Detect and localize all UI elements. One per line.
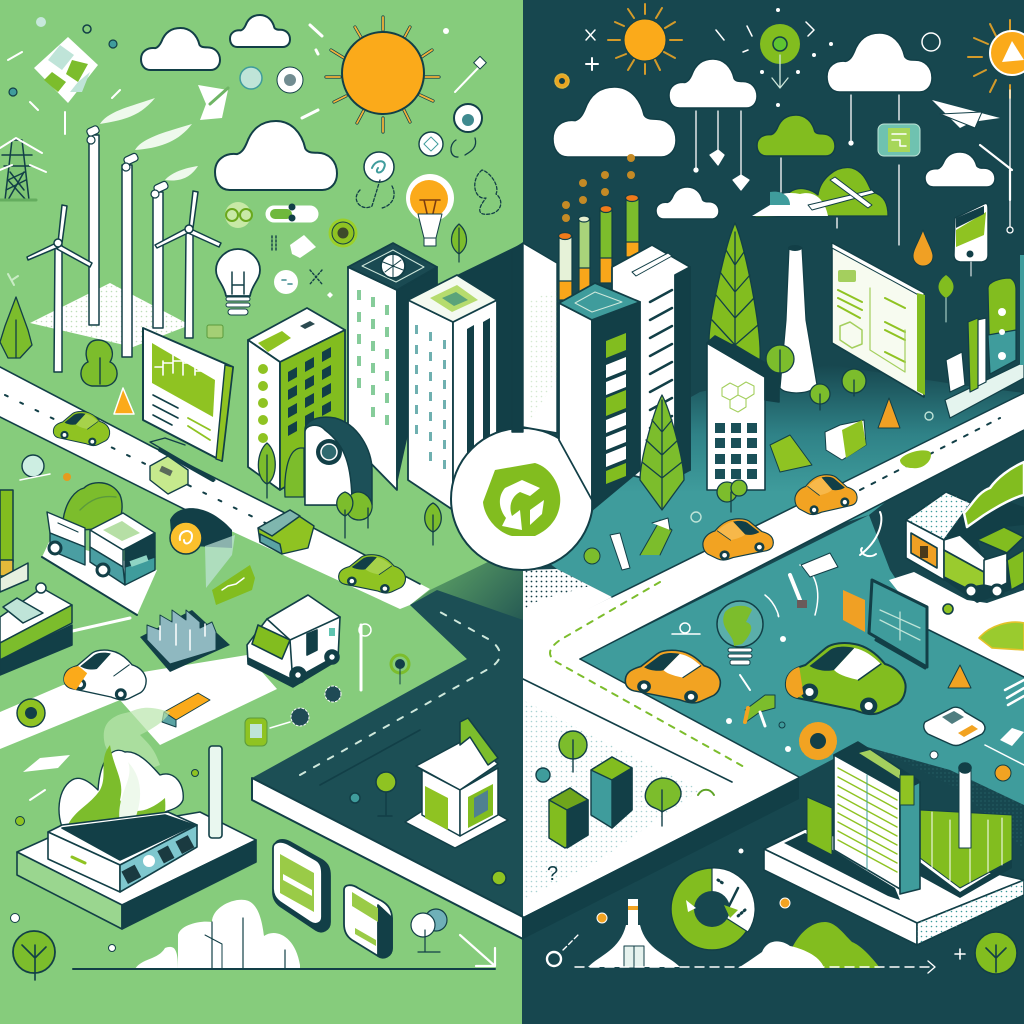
icon: horizon line and arrow left	[73, 935, 495, 969]
icon: pine tree left	[0, 297, 32, 358]
background: green half	[0, 0, 523, 1024]
icon: tree disc bottom left	[10, 770, 198, 980]
icon: chip sign	[878, 124, 920, 156]
icon: right-hand truck on white slab	[889, 462, 1024, 677]
icon: globe bulb	[717, 595, 779, 665]
panel: molecule building	[707, 336, 779, 490]
icon: clouds green side	[141, 15, 337, 190]
icon: small vehicle on road	[150, 450, 213, 494]
icon: traffic cone left	[114, 388, 134, 414]
icon: lime car left road	[53, 411, 110, 446]
panel: white stripe building	[612, 245, 690, 480]
icon: plane top right	[932, 100, 1012, 200]
icon: orange light bulb	[406, 174, 454, 246]
icon: orange cars on road	[703, 475, 857, 560]
icon: donut chart	[671, 868, 755, 950]
icon: tablet screen in teal	[843, 580, 927, 668]
icon: white delivery van	[247, 595, 340, 687]
icon: crystal block cluster	[140, 610, 230, 672]
icon: small glyph cluster centre	[245, 624, 409, 746]
icon: lime car right road	[339, 555, 406, 593]
icon: smoke from factory	[59, 708, 183, 840]
icon: factory stacks with sparks	[558, 154, 639, 300]
icon: gear	[332, 222, 354, 244]
label: question mark: ?	[547, 863, 558, 885]
icon: pixel map tile	[34, 37, 98, 103]
icon: sun right top	[608, 4, 682, 74]
icon: orange car parked	[625, 650, 720, 703]
icon: dashed arrow bottom right	[547, 935, 935, 973]
panel: white tower front	[408, 275, 497, 510]
panel: dark half ground and roads	[522, 365, 1024, 939]
icon: short pine tree	[640, 395, 684, 510]
icon: clouds bottom right	[738, 922, 880, 968]
icon: tent	[588, 899, 680, 968]
panel: dark backing block	[457, 243, 523, 455]
icon: leaf marker	[938, 275, 954, 322]
panel: green building	[248, 308, 345, 490]
icon: white car with orange nose	[64, 650, 146, 700]
panel: slab with sink left edge	[0, 490, 72, 675]
icon: tree disc bottom right	[975, 932, 1017, 974]
icon: sunflower	[802, 725, 834, 757]
icon: glyphs on teal	[584, 512, 881, 752]
icon: lens badge left	[20, 455, 71, 481]
background: dark half	[522, 0, 1024, 1024]
icon: orange drop	[913, 230, 933, 266]
icon: gold coin sign	[170, 508, 255, 605]
panel: white platform with building	[764, 742, 1024, 945]
icon: phone	[954, 203, 988, 276]
icon: central recycle badge	[451, 428, 593, 570]
panel: dark slatted building	[559, 283, 640, 510]
icon: orange dots and plus	[597, 848, 965, 959]
panel: dark slab lower centre	[252, 545, 523, 939]
panel: bar chart right	[945, 255, 1024, 418]
icon: sun left	[326, 17, 439, 132]
icon: trees beside buildings	[258, 443, 441, 545]
panel: billboard chart left	[143, 325, 233, 480]
icon: chimneys with smoke	[86, 98, 198, 357]
panel: white slab contents	[536, 731, 714, 885]
icon: white silhouettes bottom	[135, 900, 300, 969]
icon: lime car parked	[786, 643, 906, 714]
icon: small floating glyphs left	[8, 17, 501, 298]
icon: white cone tower	[780, 245, 817, 393]
icon: tablet devices bottom	[273, 840, 392, 958]
panel: factory on slab left	[17, 746, 256, 929]
icon: lime badge with hanging lines	[555, 8, 940, 107]
icon: leaf	[451, 224, 467, 262]
icon: wind turbines	[27, 191, 221, 372]
icon: tool glyph	[740, 675, 775, 726]
panel: house on dark slab	[350, 718, 508, 885]
icon: small round tree bottom	[411, 909, 447, 952]
icon: round capsule building	[305, 417, 372, 505]
icon: transmission pylon	[0, 138, 46, 200]
icon: hanging lines and arrows	[694, 90, 1013, 245]
icon: small trees right	[717, 345, 866, 512]
icon: parked van road	[258, 510, 314, 554]
icon: sun with triangle right	[968, 20, 1024, 98]
icon: device and small items right	[924, 665, 1024, 781]
icon: round tree left	[81, 340, 117, 386]
panel: top strip divider	[512, 0, 523, 243]
icon: cone and boxes teal area	[770, 398, 933, 472]
icon: truck with foliage left	[42, 483, 157, 615]
panel: tall white tower	[348, 243, 437, 490]
panel: green half roads	[0, 367, 430, 772]
panel: building white far left right side	[512, 243, 557, 433]
icon: lime cloud with plane	[752, 168, 888, 217]
icon: wheel	[17, 699, 45, 727]
icon: clouds dark side	[553, 33, 995, 219]
panel: billboard right	[832, 243, 925, 397]
icon: tall pine tree	[709, 223, 760, 360]
icon: orange road block	[162, 693, 210, 727]
panel: white base plate for turbines	[30, 283, 190, 347]
icon: white light bulb	[216, 249, 260, 315]
